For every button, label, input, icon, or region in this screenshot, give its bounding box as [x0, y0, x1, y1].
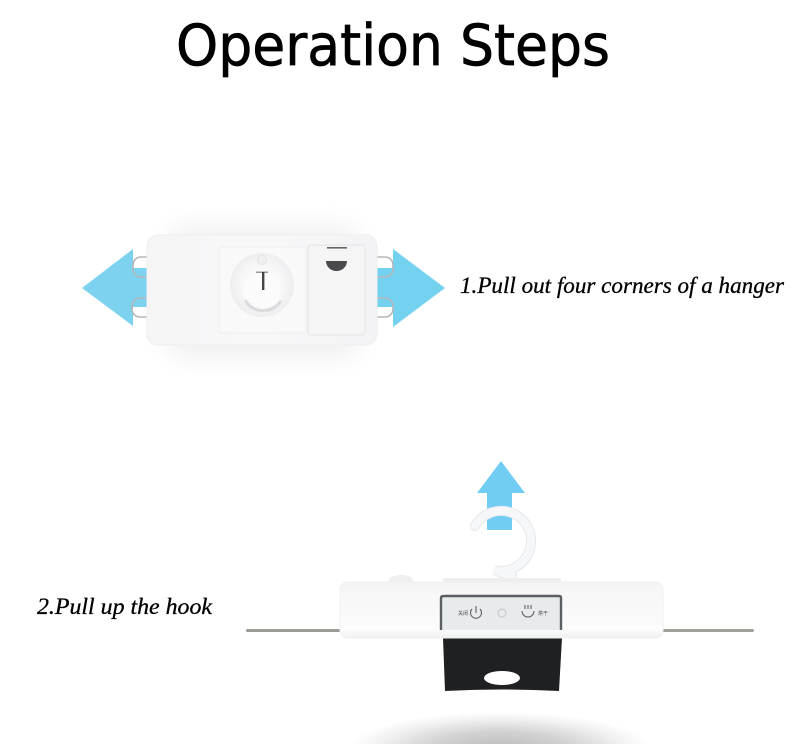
icon: power: [471, 606, 482, 618]
step 2: hanger with lifted hook: [246, 461, 754, 744]
control panel: 烘干: [538, 610, 548, 617]
battery cover: [308, 245, 365, 335]
left corner wires: [132, 257, 157, 317]
step 2 label: 2.Pull up the hook: [37, 594, 213, 619]
icon: heat: [522, 605, 534, 617]
hook: [475, 511, 531, 575]
dial plate: [219, 247, 306, 333]
floor shadow: [350, 712, 650, 744]
device shadow: [165, 226, 361, 358]
step 1: hanger with pull-out arrows: [82, 226, 445, 358]
top button: [389, 575, 413, 585]
icon: left arrow: [82, 249, 148, 326]
panel labels: 关闭: [458, 610, 468, 617]
black hanging flap: [443, 638, 562, 691]
icon: up arrow: [477, 461, 525, 530]
dial: [230, 253, 294, 317]
hanger body: [147, 235, 377, 345]
icon: right arrow: [376, 249, 445, 327]
step 1 label: 1.Pull out four corners of a hanger: [460, 273, 785, 298]
hook base: [443, 578, 561, 584]
icon: clock: [498, 609, 506, 617]
hanger body: [340, 582, 663, 638]
left wire: [246, 629, 341, 632]
right corner wires: [368, 257, 393, 317]
title: Operation Steps: [176, 13, 610, 79]
right wire: [662, 629, 754, 632]
control panel: [441, 596, 561, 630]
